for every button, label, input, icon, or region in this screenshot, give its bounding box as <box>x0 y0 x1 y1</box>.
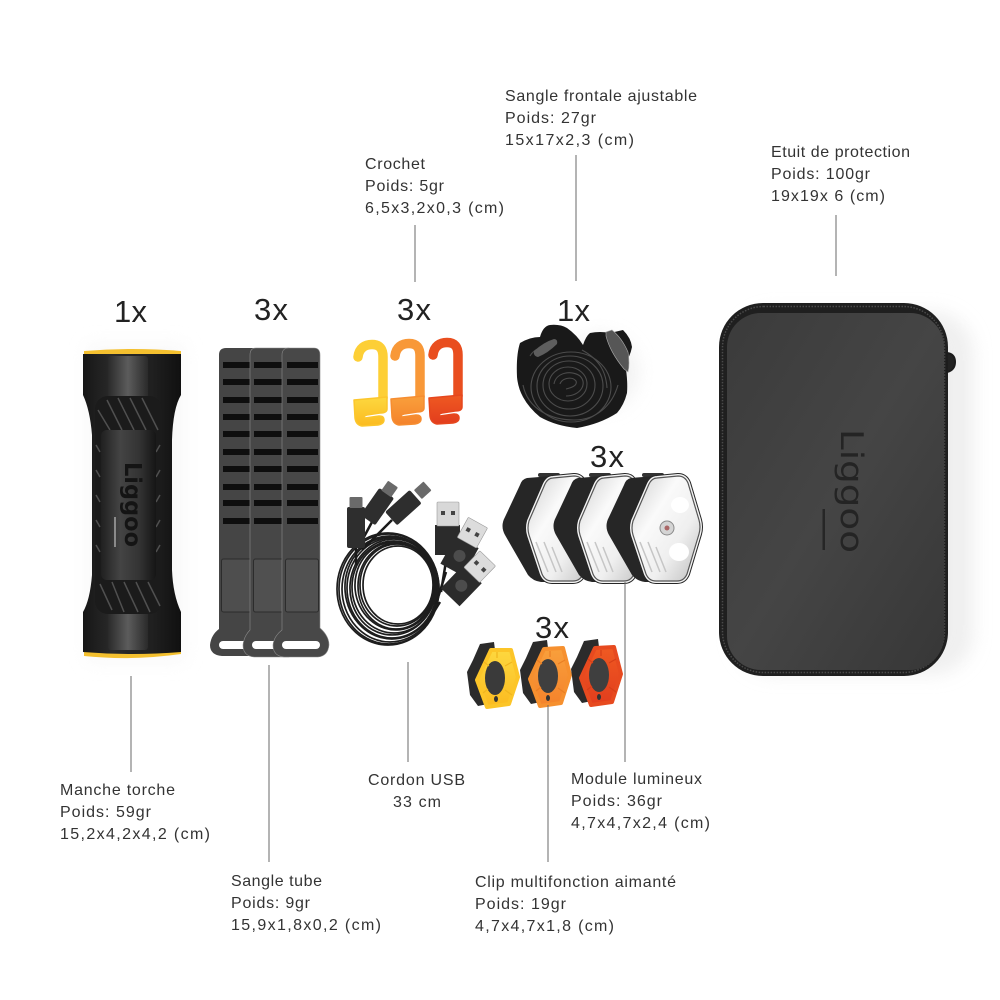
clip red <box>571 639 621 705</box>
product: sangle frontale <box>517 325 638 428</box>
leader line: sangle tube <box>268 665 270 862</box>
product: modules lumineux <box>502 473 700 582</box>
label: sangle frontale: 15x17x2,3 (cm) <box>505 132 634 149</box>
label: sangle tube: 15,9x1,8x0,2 (cm) <box>231 917 381 934</box>
label: clip multifonction <box>475 874 676 935</box>
label: cordon USB <box>368 772 465 811</box>
label: manche torche <box>60 782 210 843</box>
label: crochet: Poids: 5gr <box>365 178 445 195</box>
label: etui: 19x19x 6 (cm) <box>771 188 885 205</box>
quantity: manche: 1x <box>114 294 148 329</box>
module 1 <box>502 473 596 582</box>
clip yellow <box>467 642 518 707</box>
label: clip multifonction: 4,7x4,7x1,8 (cm) <box>475 918 614 935</box>
label: clip multifonction: Poids: 19gr <box>475 896 567 913</box>
quantity: sangle tube: 3x <box>254 292 288 327</box>
label: sangle tube: Poids: 9gr <box>231 895 311 912</box>
leader line: etui <box>835 215 837 276</box>
label: etui: Poids: 100gr <box>771 166 871 183</box>
label: cordon USB: Cordon USB <box>368 772 465 789</box>
module 2 <box>554 473 647 582</box>
quantity: crochet: 3x <box>397 292 432 327</box>
quantity: clip: 3x <box>535 610 570 645</box>
clip orange <box>520 640 570 706</box>
strap 1 <box>210 348 256 656</box>
label: sangle tube: Sangle tube <box>231 873 322 890</box>
product: cordon USB <box>337 479 497 645</box>
micro-USB plugs <box>347 479 434 548</box>
label: module lumineux: Poids: 36gr <box>571 793 663 810</box>
strap 3 <box>273 348 329 657</box>
hook yellow <box>354 344 387 426</box>
label: sangle frontale: Sangle frontale ajustable <box>505 88 697 105</box>
USB-A plugs <box>435 502 497 606</box>
cable tails <box>356 520 447 628</box>
leader line: cordon USB <box>407 662 409 762</box>
label: etui <box>771 144 910 205</box>
strap 2 <box>243 348 289 657</box>
label: manche torche: Manche torche <box>60 782 175 799</box>
label: sangle tube <box>231 873 381 934</box>
logo: Liggoo <box>833 429 869 553</box>
zipper pull <box>947 353 955 372</box>
module 3 <box>606 473 700 582</box>
label: cordon USB: 33 cm <box>393 794 441 811</box>
label: sangle frontale: Poids: 27gr <box>505 110 597 127</box>
leader line: clip <box>547 705 549 862</box>
leader line: crochet <box>414 225 416 282</box>
label: manche torche: Poids: 59gr <box>60 804 152 821</box>
product: crochets <box>354 342 462 426</box>
label: etui: Etuit de protection <box>771 144 910 161</box>
label: crochet: 6,5x3,2x0,3 (cm) <box>365 200 504 217</box>
label: clip multifonction: Clip multifonction aimanté <box>475 874 676 891</box>
quantity: sangle frontale: 1x <box>557 293 590 328</box>
label: module lumineux <box>571 771 710 832</box>
leader line: module <box>624 582 626 762</box>
leader line: sangle frontale <box>575 155 577 281</box>
product: etui de protection <box>719 303 973 676</box>
product: sangle tube <box>210 348 329 657</box>
product: clips aimantés <box>467 639 621 707</box>
label: crochet <box>365 156 504 217</box>
label: sangle frontale <box>505 88 697 149</box>
product: manche torche: Liggoo <box>119 462 145 547</box>
label: module lumineux: Module lumineux <box>571 771 702 788</box>
coiled cable <box>337 533 441 645</box>
label: module lumineux: 4,7x4,7x2,4 (cm) <box>571 815 710 832</box>
leader line: manche <box>130 676 132 772</box>
label: manche torche: 15,2x4,2x4,2 (cm) <box>60 826 210 843</box>
label: crochet: Crochet <box>365 156 426 173</box>
product: manche torche <box>83 345 184 661</box>
hook red <box>429 342 462 424</box>
hook orange <box>391 344 424 425</box>
quantity: module: 3x <box>590 439 624 474</box>
